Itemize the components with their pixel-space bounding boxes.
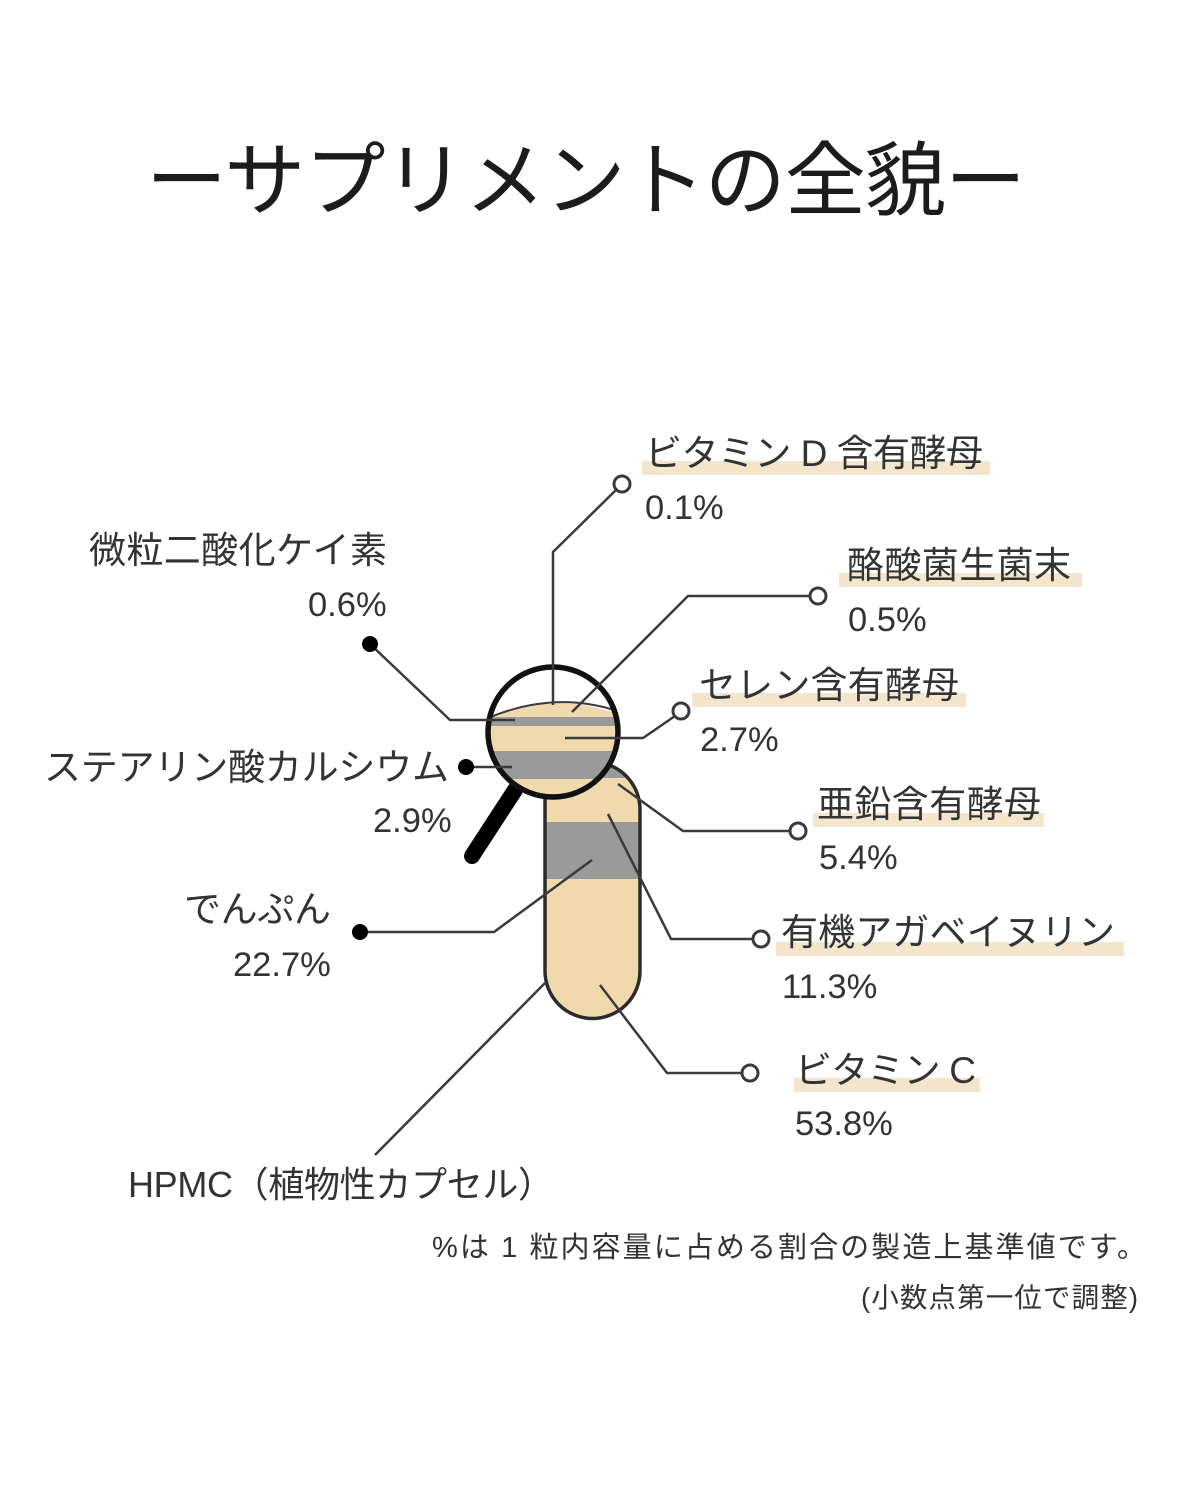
leader: HPMC [375,983,545,1155]
label: 酪酸菌生菌末: 酪酸菌生菌末 [847,545,1071,586]
label: ステアリン酸カルシウム [44,747,452,840]
label: 有機アガベイヌリン [781,912,1115,1006]
label: セレン含有酵母 [699,665,959,759]
leader: ビタミンC [600,985,758,1081]
label: 有機アガベイヌリン: 11.3% [782,968,877,1006]
label: でんぷん [184,889,331,984]
footnote: (小数点第一位で調整) [861,1282,1138,1313]
leader: ビタミンD [553,476,630,705]
label: ステアリン酸カルシウム: 2.9% [373,802,452,840]
label: 亜鉛含有酵母 [817,784,1041,877]
label: 微粒二酸化ケイ素: 0.6% [308,586,387,624]
label: ビタミンD含有酵母 [645,433,983,527]
label: 亜鉛含有酵母: 5.4% [819,839,898,877]
leader: でんぷん [352,860,592,940]
leader: アガベイヌリン [608,814,769,947]
highlights under labels [642,461,1124,1092]
capsule [540,760,645,1022]
magnifying glass [472,667,630,856]
leader: 酪酸菌 [572,588,826,712]
footnote: %は 1 粒内容量に占める割合の製造上基準値です。 [432,1231,1146,1264]
label: 微粒二酸化ケイ素: 微粒二酸化ケイ素 [89,530,387,571]
label: ビタミンD含有酵母: ビタミン D 含有酵母 [645,433,983,474]
label: 有機アガベイヌリン: 有機アガベイヌリン [781,912,1115,953]
label: 酪酸菌生菌末 [847,545,1071,639]
label: ビタミンD含有酵母: 0.1% [645,489,724,527]
leader: ステアリン酸カルシウム [458,759,512,775]
footnote [432,1231,1146,1313]
label: ビタミンC: ビタミン C [795,1050,976,1091]
label: でんぷん: でんぷん [184,889,331,930]
label: ステアリン酸カルシウム: ステアリン酸カルシウム [44,747,449,788]
label: でんぷん: 22.7% [233,946,331,984]
label: セレン含有酵母: セレン含有酵母 [699,665,959,706]
label: 亜鉛含有酵母: 亜鉛含有酵母 [817,784,1041,825]
title: ーサプリメントの全貌ー [146,137,1026,227]
label: ビタミンC [795,1050,976,1143]
label: ビタミンC: 53.8% [795,1105,893,1143]
label: 酪酸菌生菌末: 0.5% [848,601,927,639]
label: セレン含有酵母: 2.7% [700,721,779,759]
label: 微粒二酸化ケイ素 [89,530,387,624]
leader: セレン [565,703,689,738]
leader: 微粒二酸化ケイ素 [362,636,515,720]
leader: 亜鉛 [618,784,806,839]
label: HPMC: HPMC（植物性カプセル） [128,1164,554,1205]
